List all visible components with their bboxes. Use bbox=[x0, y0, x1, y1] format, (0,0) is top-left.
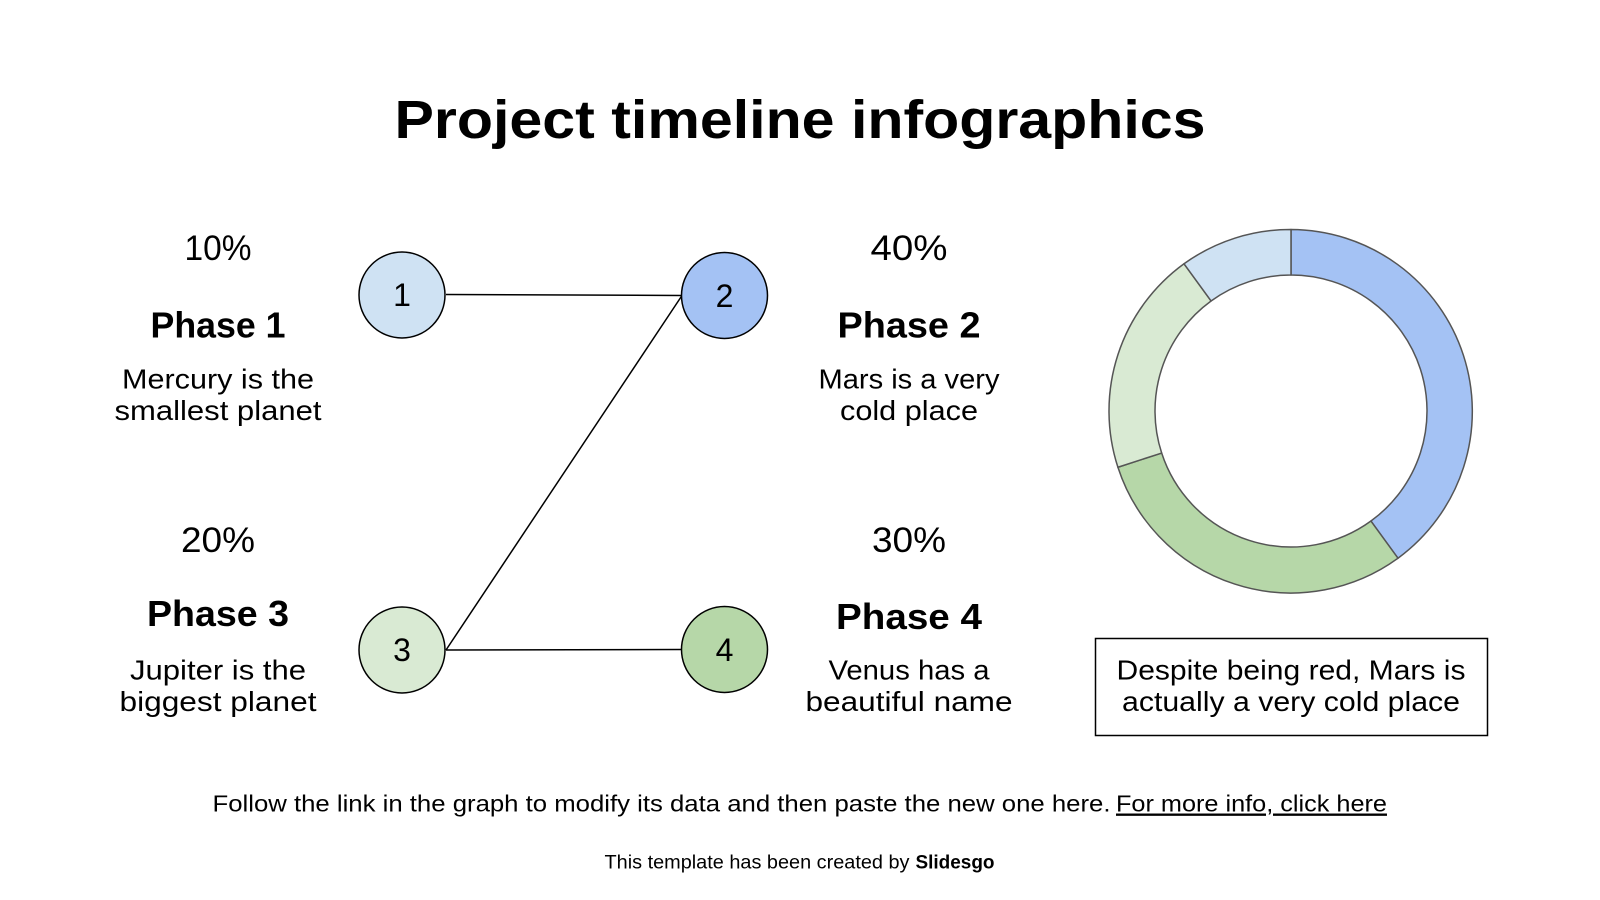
phase 1 percentage: 10% bbox=[184, 229, 252, 268]
segment: 10% light blue bbox=[1184, 229, 1291, 301]
phase 3 description: Jupiter is the bbox=[130, 654, 306, 686]
node 1 bbox=[359, 252, 445, 338]
panel: phase 3 text bbox=[120, 521, 317, 717]
phase 2 heading: Phase 2 bbox=[838, 304, 980, 346]
phase 1 description: Mercury is the bbox=[122, 364, 314, 394]
panel: phase 1 text bbox=[114, 229, 322, 426]
phase 1 description: smallest planet bbox=[114, 395, 322, 426]
phase 4 description: beautiful name bbox=[806, 686, 1012, 717]
phase 2 description: cold place bbox=[840, 395, 978, 426]
callout: Despite being red, Mars is bbox=[1116, 654, 1466, 686]
node 4 bbox=[682, 606, 768, 692]
segment: 20% light green bbox=[1109, 264, 1211, 467]
phase 2 description bbox=[818, 364, 1000, 426]
phase 3 description: biggest planet bbox=[120, 686, 317, 717]
phase 3 description bbox=[120, 654, 317, 717]
donut chart bbox=[1109, 229, 1472, 593]
phase 2 description: Mars is a very bbox=[818, 364, 1000, 394]
node 3: 3 bbox=[393, 632, 411, 668]
node 2: 2 bbox=[716, 278, 733, 314]
segment: 30% green bbox=[1118, 453, 1398, 593]
phase 4 heading: Phase 4 bbox=[836, 596, 982, 637]
node 3 bbox=[359, 607, 445, 693]
phase 1 heading: Phase 1 bbox=[150, 304, 286, 346]
footer note bbox=[212, 790, 1387, 816]
node 4: 4 bbox=[716, 632, 733, 668]
phase 3 heading: Phase 3 bbox=[147, 593, 289, 634]
phase 1 description bbox=[114, 364, 322, 426]
footer note: Follow the link in the graph to modify its data and then paste the new one here. bbox=[212, 790, 1110, 816]
credit line: Slidesgo bbox=[916, 852, 994, 874]
callout bbox=[1096, 638, 1488, 736]
phase 2 percentage: 40% bbox=[870, 229, 948, 268]
panel: phase 4 text bbox=[806, 521, 1012, 717]
callout: actually a very cold place bbox=[1122, 686, 1460, 717]
link text: For more info, click here bbox=[1116, 790, 1387, 816]
node 1: 1 bbox=[393, 277, 411, 313]
phase 4 description: Venus has a bbox=[828, 654, 990, 686]
phase 4 description bbox=[806, 654, 1012, 717]
phase 4 percentage: 30% bbox=[872, 521, 946, 560]
timeline connector lines bbox=[446, 294, 682, 650]
segment: 40% blue bbox=[1291, 230, 1472, 558]
phase 3 percentage: 20% bbox=[181, 521, 255, 560]
title: Project timeline infographics bbox=[394, 90, 1206, 150]
panel: phase 2 text bbox=[818, 229, 1000, 426]
credit line: This template has been created by bbox=[604, 852, 910, 874]
node 2 bbox=[682, 252, 768, 338]
